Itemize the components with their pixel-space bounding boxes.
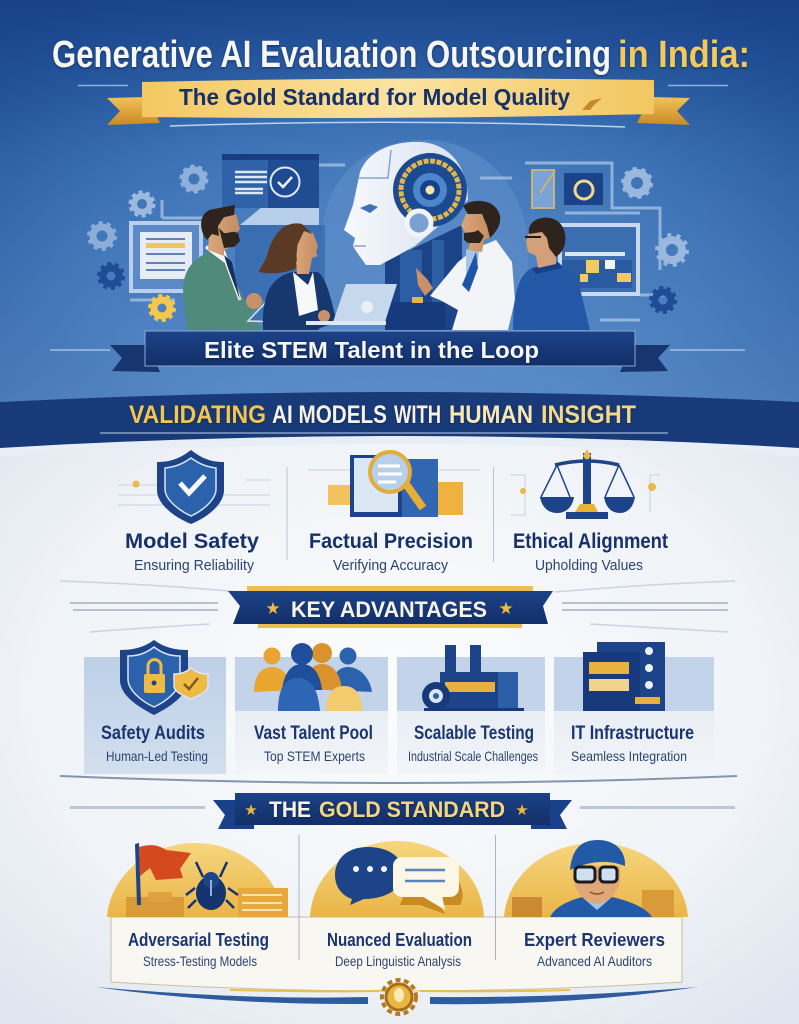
banner: the gold standard: GOLD STANDARD [319, 797, 505, 822]
text: ethical alignment [513, 530, 668, 574]
icon: flag and bug [107, 843, 288, 917]
banner: key advantages: KEY ADVANTAGES [291, 597, 487, 622]
robot head [344, 142, 468, 265]
banner: key advantages: ★ [498, 599, 514, 618]
laptop [306, 284, 397, 325]
pen and note [532, 170, 555, 208]
background: blue header [0, 0, 799, 420]
gear: navy left [99, 264, 123, 288]
icon: speech bubbles [310, 841, 484, 917]
section band: validating heading: INSIGHT [541, 401, 636, 429]
text: factual precision [309, 530, 473, 574]
text: ethical alignment: Upholding Values [535, 557, 643, 574]
card: vast talent pool [235, 643, 388, 774]
card: safety audits: Human-Led Testing [106, 748, 208, 764]
card: scalable testing: Scalable Testing [414, 723, 534, 744]
text: adversarial testing [128, 930, 269, 969]
panel frame [111, 917, 682, 991]
card: IT infrastructure: Seamless Integration [571, 748, 687, 764]
dome behind robot [322, 140, 528, 330]
background: lower page [0, 430, 799, 1024]
section band: validating heading: AI MODELS [272, 401, 387, 429]
chip [564, 173, 603, 205]
card: scalable testing [397, 645, 545, 774]
banner: the gold standard: ★ [515, 802, 529, 819]
text: expert reviewers: Advanced AI Auditors [537, 953, 652, 969]
card: IT infrastructure: IT Infrastructure [571, 723, 694, 744]
text: model safety: Ensuring Reliability [134, 557, 254, 574]
card: IT infrastructure [554, 642, 714, 774]
subtitle gold ribbon: The Gold Standard for Model Quality [179, 84, 570, 110]
gear: upper right [623, 169, 651, 197]
person: man in white coat [416, 201, 515, 330]
gear: gold [150, 296, 174, 320]
text: model safety: Model Safety [125, 530, 259, 553]
person: man in green suit [183, 205, 262, 330]
banner: Elite STEM Talent [50, 331, 745, 372]
title: Generative AI Evaluation Outsourcing [52, 34, 611, 76]
icon: shield check [118, 450, 270, 524]
text: factual precision: Factual Precision [309, 530, 473, 553]
text: adversarial testing: Adversarial Testing [128, 930, 269, 950]
robot ear [407, 211, 431, 235]
title: in India: [618, 34, 750, 76]
icon: expert reviewer [504, 840, 688, 917]
card: vast talent pool: Top STEM Experts [264, 748, 365, 764]
icon: document and magnifier [308, 452, 480, 517]
card: vast talent pool: Vast Talent Pool [254, 723, 373, 744]
tablet [248, 298, 298, 322]
gear: navy right [651, 288, 675, 312]
document screen [131, 223, 201, 291]
card: safety audits [84, 640, 226, 774]
monitor with check [222, 154, 319, 225]
panel: key advantage cards [84, 640, 714, 774]
text: nuanced evaluation: Nuanced Evaluation [327, 930, 472, 950]
panel: validation pillars [118, 449, 668, 574]
text: factual precision: Verifying Accuracy [333, 557, 448, 574]
gear: right [657, 235, 687, 265]
banner: the gold standard [70, 793, 735, 829]
text: nuanced evaluation [327, 930, 472, 969]
card: scalable testing: Industrial Scale Challenges [408, 748, 538, 764]
banner: key advantages [70, 586, 728, 628]
hero illustration [89, 140, 687, 330]
banner: the gold standard: ★ [244, 802, 258, 819]
text: expert reviewers [524, 930, 665, 969]
data screen [560, 225, 638, 294]
person: man in blue [513, 218, 590, 330]
back grid panel [235, 225, 325, 300]
banner: Elite STEM Talent: Elite STEM Talent in the Loop [204, 337, 539, 363]
banner: the gold standard: THE [269, 797, 311, 822]
person: woman in navy [259, 223, 337, 330]
panel: gold standard pillars [107, 835, 688, 991]
robot neck and body [385, 225, 462, 330]
banner: key advantages: ★ [265, 599, 281, 618]
bottom ornament: swoosh and gear [96, 980, 698, 1014]
gear: far left [89, 223, 115, 249]
text: nuanced evaluation: Deep Linguistic Analysis [335, 953, 461, 969]
text: adversarial testing: Stress-Testing Models [143, 953, 257, 969]
section band: validating heading: HUMAN [449, 401, 533, 429]
section band: validating heading: WITH [394, 401, 441, 429]
section band: validating heading: VALIDATING [129, 401, 266, 429]
subtitle gold ribbon [78, 78, 728, 127]
text: expert reviewers: Expert Reviewers [524, 930, 665, 950]
circuit connectors [130, 163, 665, 320]
text: ethical alignment: Ethical Alignment [513, 530, 668, 553]
robot brain [393, 153, 467, 227]
icon: balance scales [510, 449, 660, 519]
gear: upper left [182, 166, 206, 192]
card: safety audits: Safety Audits [101, 723, 205, 744]
section band: validating heading [0, 392, 799, 456]
text: model safety [125, 530, 259, 574]
gear: left [130, 192, 154, 216]
